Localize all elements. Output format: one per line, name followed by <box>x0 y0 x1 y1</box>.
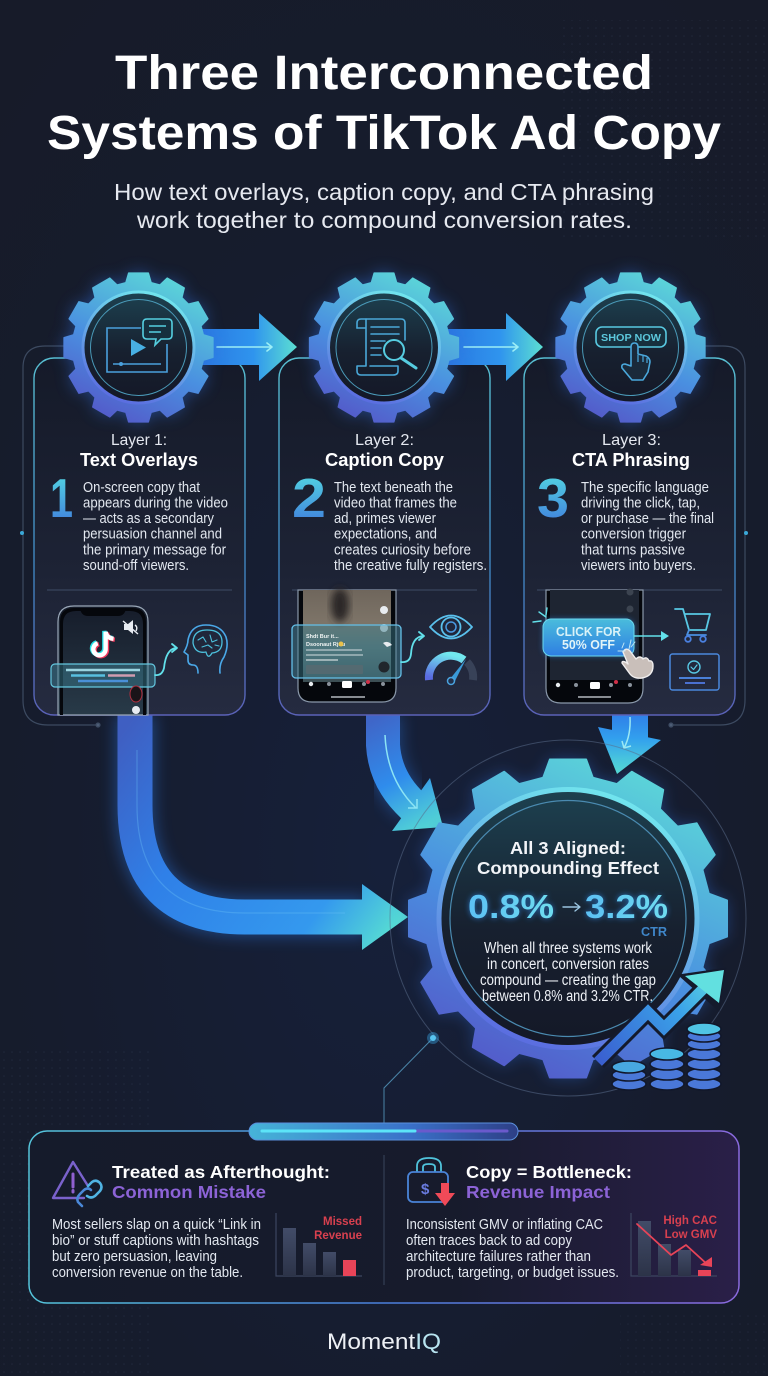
text: revenue impact: often traces back to ad copy <box>406 1232 572 1249</box>
heading: common mistake: Treated as Afterthought: <box>112 1162 330 1182</box>
heading: layer 2: Caption Copy <box>325 450 444 470</box>
description layer 3: driving the click, tap, <box>581 494 700 512</box>
text: common mistake: bio” or stuff captions with hashtags <box>52 1232 259 1249</box>
text: common mistake <box>52 1216 261 1281</box>
growth arrow <box>598 970 724 1062</box>
text: common mistake: conversion revenue on the table. <box>52 1264 243 1281</box>
description layer 3: conversion trigger <box>581 526 686 543</box>
numeral 2: 2 <box>292 467 326 529</box>
description layer 1: persuasion channel and <box>83 526 222 543</box>
heading: layer 3 <box>572 432 690 470</box>
heading: revenue impact <box>466 1162 632 1202</box>
heading: revenue impact: Revenue Impact <box>466 1182 610 1202</box>
numeral 1: 1 <box>50 467 73 529</box>
illustration: phone with cta button, cart and receipt <box>533 588 719 703</box>
description layer 2 <box>334 479 487 574</box>
illustration: phone with caption, eye and gauge: Dsoonaut Rjuu <box>306 642 345 648</box>
compounding description <box>480 940 656 1005</box>
text: revenue impact: Inconsistent GMV or inflating CAC <box>406 1216 603 1233</box>
text: revenue impact: architecture failures rather than <box>406 1248 591 1265</box>
description layer 1: — acts as a secondary <box>83 510 214 527</box>
panel: layer 1 text overlays <box>34 358 245 715</box>
flow arrow: layer 3 to compounding gear <box>598 715 661 774</box>
description layer 2: The text beneath the <box>334 479 453 496</box>
icon: warning with chain link <box>53 1162 102 1206</box>
heading: layer 2: Layer 2: <box>355 432 414 449</box>
panel: layer 3 cta phrasing <box>524 358 735 715</box>
description layer 3: or purchase — the final <box>581 510 714 527</box>
heading: layer 3: CTA Phrasing <box>572 450 690 470</box>
heading: layer 1: Layer 1: <box>111 432 167 449</box>
subtitle: work together to compound conversion rates. <box>136 207 632 233</box>
compounding description: When all three systems work <box>484 940 652 957</box>
description layer 3 <box>581 479 714 574</box>
chart: high cac low gmv <box>631 1213 717 1276</box>
compounding heading: All 3 Aligned: <box>510 838 626 858</box>
description layer 1: the primary message for <box>83 542 226 558</box>
description layer 1 <box>83 479 228 574</box>
large gear: compounding effect <box>409 760 727 1078</box>
illustration: phone with caption, eye and gauge <box>292 588 473 702</box>
connector pill <box>249 1123 518 1140</box>
description layer 1: appears during the video <box>83 494 228 512</box>
heading: layer 3: Layer 3: <box>602 432 661 449</box>
metric: ctr lift: 0.8% <box>468 888 554 925</box>
arrow: layer 2 to layer 3 <box>447 313 543 381</box>
text: revenue impact <box>406 1216 619 1281</box>
subtitle <box>114 179 654 233</box>
outer orbit ring around compounding gear <box>390 740 746 1096</box>
text: revenue impact: product, targeting, or budget issues. <box>406 1264 619 1281</box>
arrow: layer 1 to layer 2 <box>200 313 297 381</box>
metric: ctr lift: CTR <box>641 924 668 939</box>
description layer 2: ad, primes viewer <box>334 510 436 527</box>
metric: ctr lift: 3.2% <box>585 888 668 925</box>
numeral 3: 3 <box>537 467 569 529</box>
description layer 2: video that frames the <box>334 494 457 512</box>
gear 3: shop now button with hand: SHOP NOW <box>601 332 661 344</box>
compounding heading <box>477 838 659 878</box>
gear 1: video with speech bubble <box>64 273 213 422</box>
description layer 2: the creative fully registers. <box>334 557 487 574</box>
text: common mistake: but zero persuasion, leaving <box>52 1248 217 1265</box>
heading: common mistake <box>112 1162 330 1202</box>
heading: layer 1 <box>80 432 198 470</box>
heading: layer 1: Text Overlays <box>80 450 198 470</box>
heading: layer 2 <box>325 432 444 470</box>
metric: ctr lift <box>468 888 668 939</box>
compounding description: between 0.8% and 3.2% CTR. <box>482 988 653 1005</box>
chart: missed revenue <box>276 1213 362 1276</box>
panel: layer 2 caption copy <box>279 358 490 715</box>
chart: missed revenue: Missed <box>323 1216 362 1228</box>
illustration: phone with cta button, cart and receipt: 50% OFF <box>562 638 615 652</box>
gear 2: script with magnifier <box>310 273 458 422</box>
illustration: phone with caption, eye and gauge: Shdt Bur it... <box>306 634 339 640</box>
connector line to bottom panel <box>384 1032 439 1124</box>
description layer 1: On-screen copy that <box>83 479 201 496</box>
description layer 3: that turns passive <box>581 542 685 558</box>
illustration: phone with cta button, cart and receipt: CLICK FOR <box>556 625 621 639</box>
compounding heading: Compounding Effect <box>477 858 659 878</box>
outer circuit lines <box>23 346 745 727</box>
coin stacks <box>612 1023 721 1090</box>
compounding description: compound — creating the gap <box>480 972 656 989</box>
text: common mistake: Most sellers slap on a quick “Link in <box>52 1216 261 1233</box>
icon: padlock with down arrow <box>408 1158 455 1206</box>
icon: padlock with down arrow: $ <box>421 1181 430 1198</box>
chart: high cac low gmv: Low GMV <box>665 1229 717 1241</box>
description layer 2: expectations, and <box>334 526 437 543</box>
illustration: phone with overlay and brain <box>51 606 227 715</box>
title: Three Interconnected <box>115 47 653 100</box>
subtitle: How text overlays, caption copy, and CTA phrasing <box>114 179 654 205</box>
panel: bottom insights <box>29 1123 739 1303</box>
flow arrow: layer 1 to compounding gear <box>135 715 408 950</box>
title <box>47 47 721 160</box>
heading: revenue impact: Copy = Bottleneck: <box>466 1162 632 1182</box>
description layer 1: sound-off viewers. <box>83 557 189 574</box>
description layer 3: The specific language <box>581 479 709 496</box>
title: Systems of TikTok Ad Copy <box>47 107 721 160</box>
gear 3: shop now button with hand <box>556 273 705 422</box>
chart: missed revenue: Revenue <box>314 1230 362 1242</box>
brand logo: Moment IQ <box>327 1329 441 1354</box>
description layer 2: creates curiosity before <box>334 542 471 558</box>
compounding description: in concert, conversion rates <box>487 956 649 973</box>
metric: ctr lift: 3.2% <box>585 888 668 925</box>
chart: high cac low gmv: High CAC <box>663 1215 717 1227</box>
description layer 3: viewers into buyers. <box>581 557 696 574</box>
metric: ctr lift: 0.8% <box>468 888 554 925</box>
heading: common mistake: Common Mistake <box>112 1182 266 1202</box>
flow arrow: layer 2 to compounding gear <box>383 715 443 831</box>
